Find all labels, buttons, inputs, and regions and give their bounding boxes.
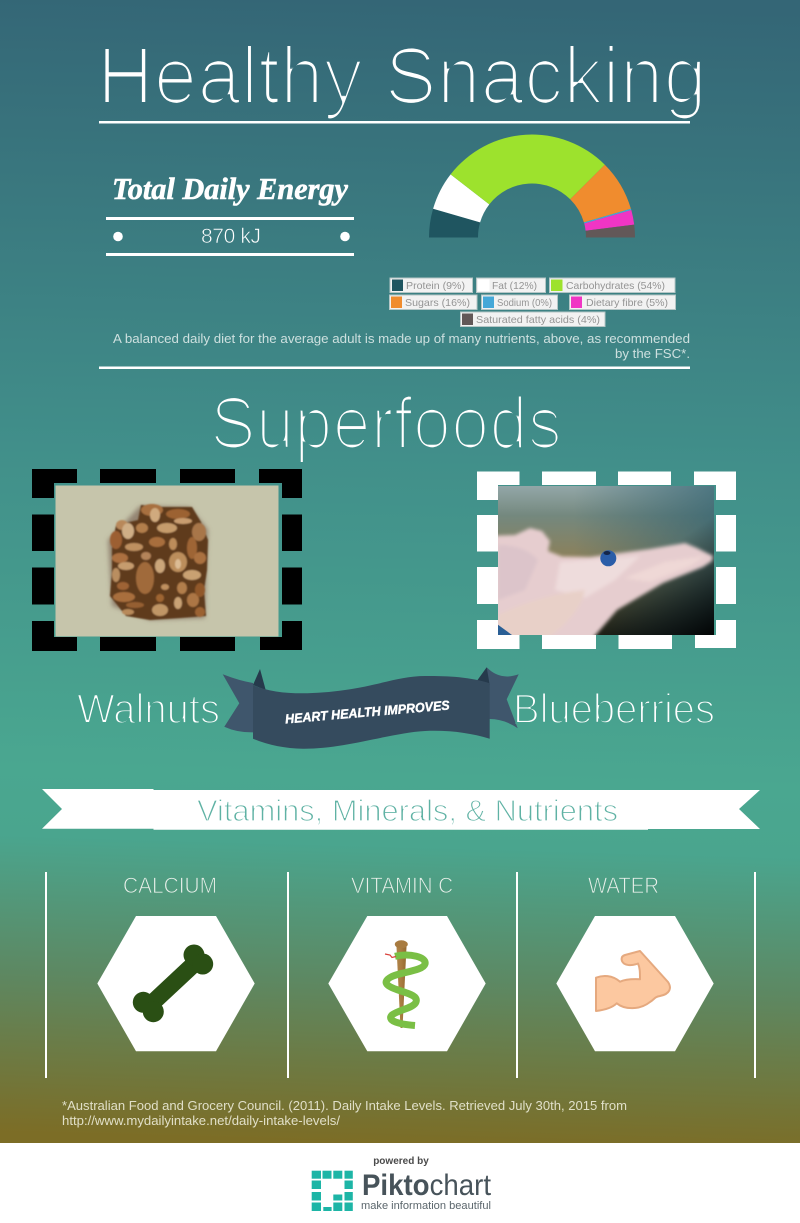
hexagon — [556, 916, 714, 1051]
ribbon body — [253, 676, 490, 749]
chart legend: Carbohydrates (54%) — [566, 280, 665, 292]
label: blueberries: Blueberries — [513, 685, 715, 732]
icon: bone — [133, 944, 213, 1022]
footnote: http://www.mydailyintake.net/daily-intake-levels/ — [62, 1113, 340, 1128]
chart legend: Saturated fatty acids (4%) — [476, 314, 600, 326]
footer: powered by piktochart — [0, 1143, 800, 1223]
energy value: 870 kJ — [201, 225, 261, 248]
label: calcium: CALCIUM — [123, 873, 217, 898]
powered by text: powered by — [373, 1156, 429, 1167]
label: vitamin c: VITAMIN C — [351, 873, 453, 898]
title: Healthy Snacking — [97, 31, 707, 120]
label: water: WATER — [588, 873, 659, 898]
description text — [113, 331, 690, 361]
section banner: vitamins, minerals and nutrients: Vitamins, Minerals, & Nutrients — [197, 793, 618, 828]
panel: total daily energy — [106, 171, 354, 256]
panel: walnuts photo with frame — [32, 469, 302, 651]
panel: calcium — [97, 873, 255, 1051]
panel: vitamin c — [328, 873, 486, 1051]
ribbon tails — [223, 674, 262, 732]
hexagon — [97, 916, 255, 1051]
chart legend: Dietary fibre (5%) — [586, 297, 668, 309]
piktochart wordmark: Piktochart — [362, 1169, 492, 1202]
footnote: *Australian Food and Grocery Council. (2011). Daily Intake Levels. Retrieved July 30th, 2015 from — [62, 1098, 627, 1113]
piktochart logo mark — [312, 1171, 353, 1211]
walnuts photo — [56, 486, 278, 636]
description text: by the FSC*. — [615, 346, 690, 361]
heading: superfoods: Superfoods — [210, 384, 562, 464]
hexagon — [328, 916, 486, 1051]
chart legend: Sodium (0%) — [497, 297, 552, 309]
description text: A balanced daily diet for the average adult is made up of many nutrients, above, as recommended — [113, 331, 690, 346]
footnote — [62, 1098, 627, 1128]
chart legend — [390, 278, 676, 326]
chart legend: Fat (12%) — [492, 280, 537, 292]
ribbon banner — [223, 667, 519, 749]
panel: water — [556, 873, 714, 1051]
label: walnuts: Walnuts — [77, 685, 220, 732]
heading: total daily energy: Total Daily Energy — [112, 171, 348, 206]
tagline: make information beautiful — [361, 1200, 491, 1212]
chart legend: Sugars (16%) — [405, 297, 470, 309]
black dashed frame — [32, 469, 302, 651]
chart legend: Protein (9%) — [406, 280, 465, 292]
ribbon folds — [253, 669, 266, 690]
blueberry on hand photo — [498, 486, 714, 635]
icon: flexed arm — [596, 951, 670, 1011]
white dashed frame — [477, 472, 736, 649]
icon: staff and serpent — [385, 940, 425, 1028]
panel: blueberry photo with frame — [477, 472, 736, 649]
semicircle donut chart — [429, 135, 635, 238]
ribbon text: HEART HEALTH IMPROVES — [284, 697, 450, 726]
section banner: vitamins, minerals and nutrients — [42, 789, 760, 830]
